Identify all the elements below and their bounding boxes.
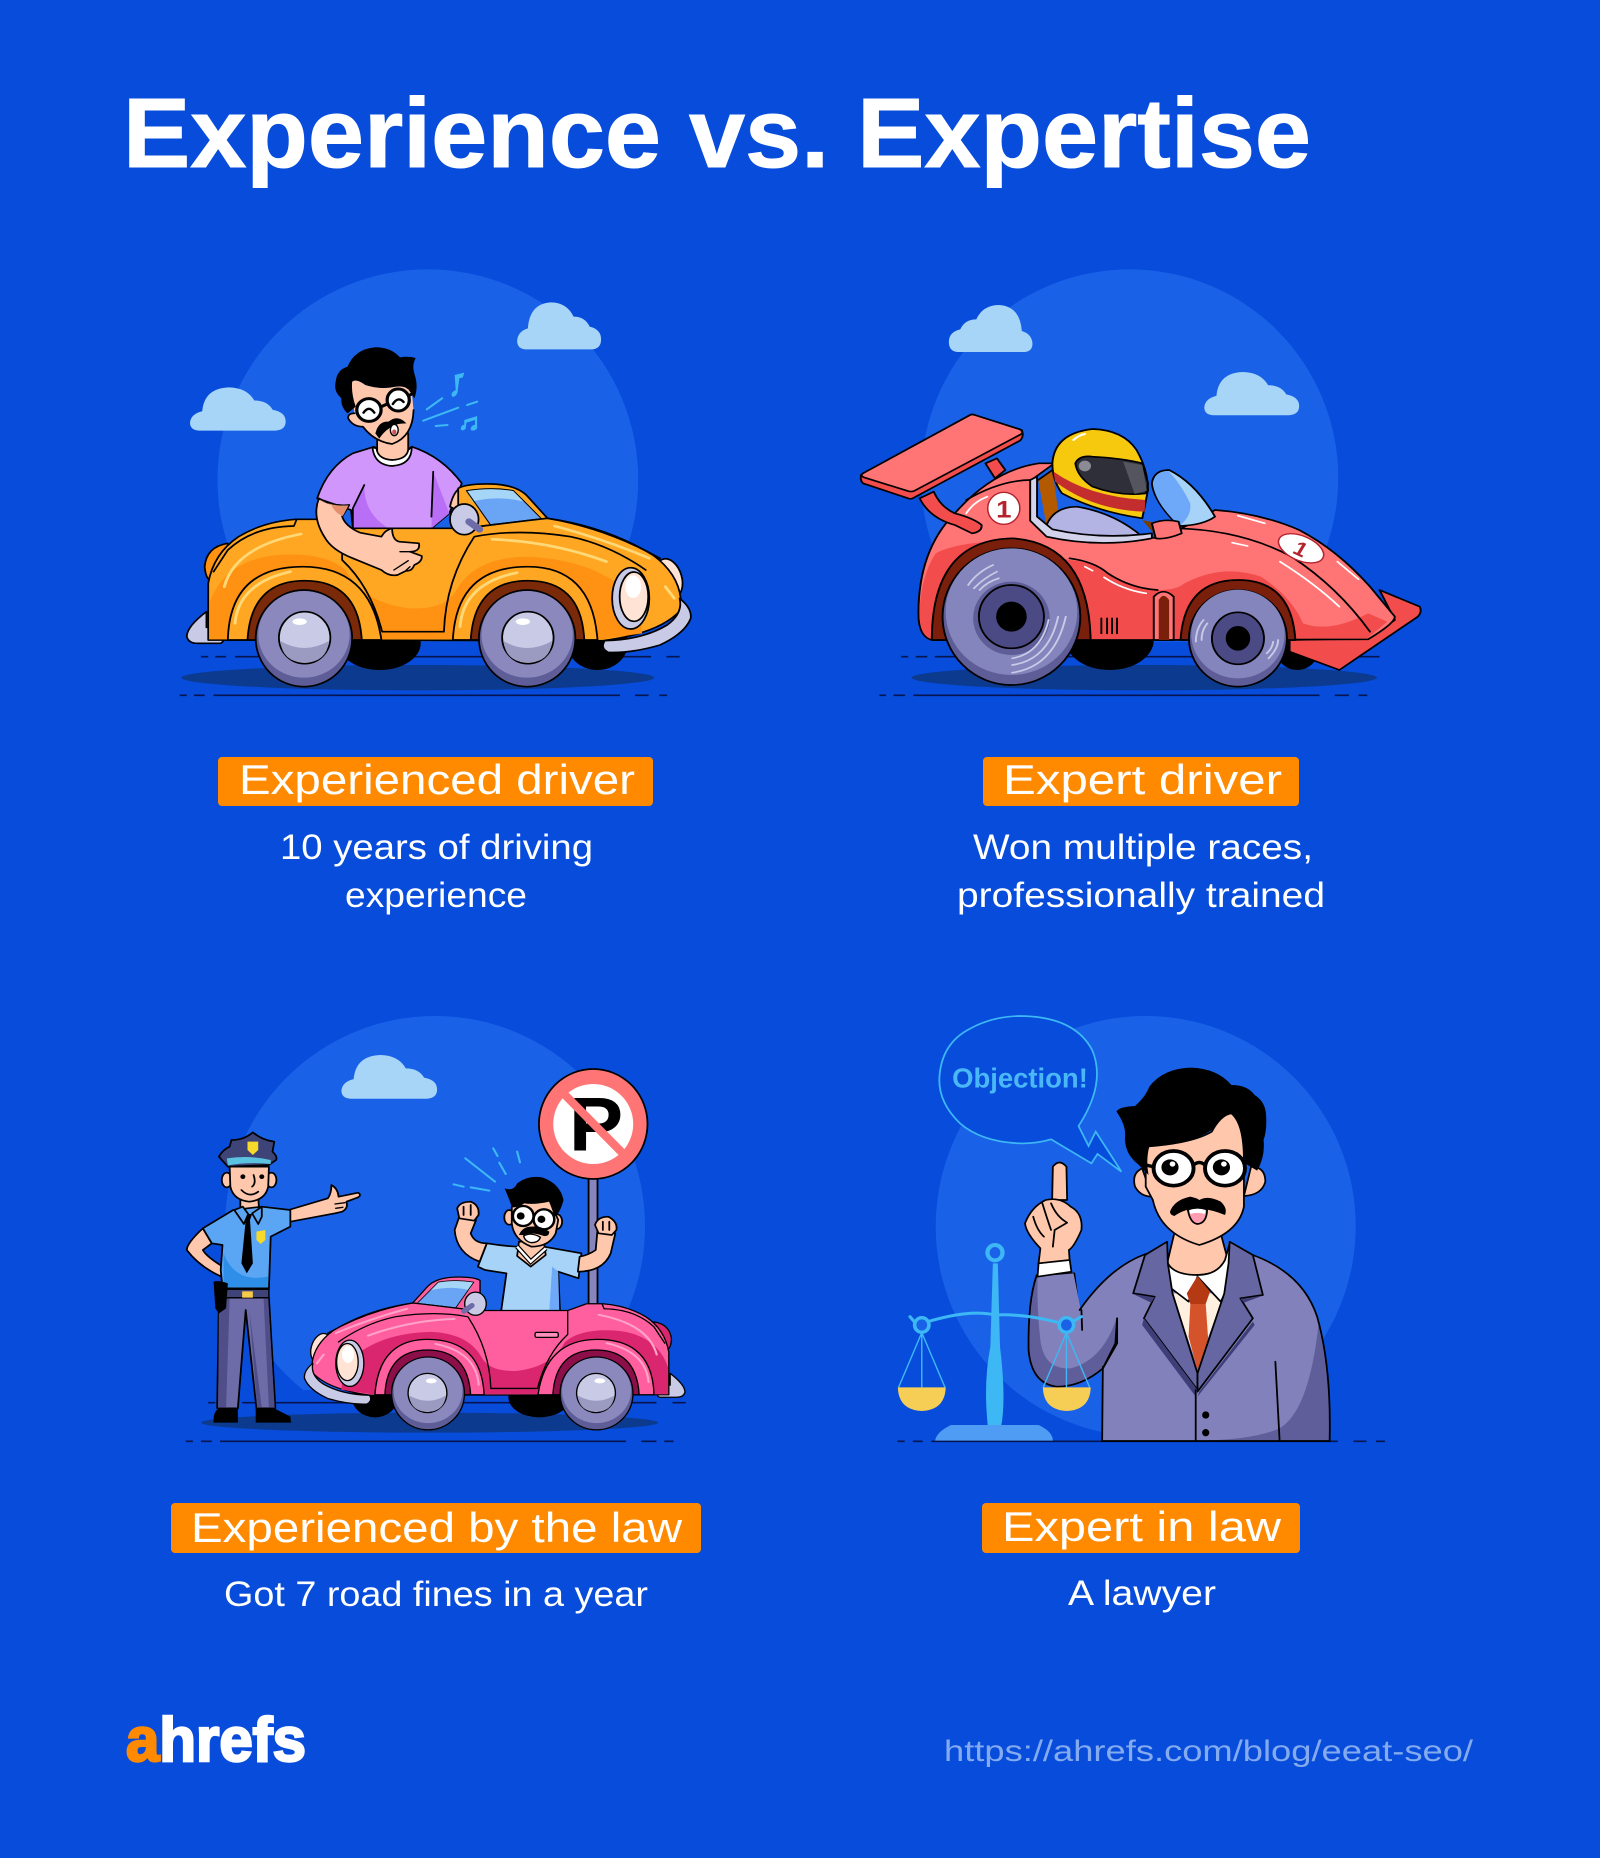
justice scale <box>898 1245 1091 1441</box>
highlights <box>966 497 1358 607</box>
road lines <box>897 1439 1385 1444</box>
front wheel <box>1181 580 1295 640</box>
side vents <box>1154 592 1174 640</box>
title: Experience vs. Expertise <box>123 78 1311 188</box>
speech bubble: Objection! <box>952 1063 1088 1094</box>
text: expert in law description: A lawyer <box>1068 1574 1216 1613</box>
rear wing strut <box>920 492 982 533</box>
helmeted driver <box>1038 429 1158 537</box>
anger lines <box>454 1148 520 1191</box>
police officer <box>187 1132 360 1423</box>
cloud right <box>1204 372 1299 415</box>
panel: experienced by the law illustration <box>160 1016 720 1447</box>
angry driver <box>455 1177 617 1312</box>
music notes <box>423 373 477 431</box>
background circle <box>921 269 1338 686</box>
text: experienced driver description <box>280 828 593 915</box>
no parking sign: P <box>569 1082 623 1167</box>
speech bubble <box>939 1016 1121 1172</box>
driver <box>317 347 474 528</box>
panel: expert driver illustration <box>840 269 1440 698</box>
road lines <box>186 1403 686 1441</box>
rear wheel <box>932 538 1091 640</box>
number badge front: 1 <box>1289 537 1312 562</box>
panel: experienced driver illustration <box>160 269 720 698</box>
text: expert driver description: professionally trained <box>957 876 1325 915</box>
cloud <box>341 1055 437 1099</box>
cloud left <box>949 305 1032 352</box>
pink car <box>304 1277 685 1430</box>
number badge rear: 1 <box>996 497 1011 523</box>
logo: ahrefs: ahrefs <box>126 1706 306 1775</box>
label: expert driver: Expert driver <box>1003 756 1282 803</box>
windscreen <box>1152 470 1215 526</box>
text: experienced driver description: experience <box>345 876 527 915</box>
label: experienced by the law: Experienced by the law <box>191 1504 683 1551</box>
cloud left <box>190 387 286 431</box>
background circle <box>936 1016 1356 1437</box>
road lines <box>879 657 1380 695</box>
ground shadow <box>912 665 1377 690</box>
label: expert in law: Expert in law <box>1002 1503 1282 1550</box>
lawyer <box>1025 1068 1330 1441</box>
background circle <box>217 269 638 690</box>
label: experienced driver: Experienced driver <box>239 756 635 803</box>
number badge front <box>1273 528 1329 569</box>
background circle <box>225 1016 645 1437</box>
cloud right <box>517 302 601 349</box>
road lines <box>180 657 680 695</box>
driver arm and hand <box>316 498 422 575</box>
ground shadow <box>201 1413 658 1433</box>
panel: expert in law illustration <box>897 1016 1385 1441</box>
rear wing <box>861 414 1023 499</box>
number badge rear <box>988 492 1020 524</box>
car: orange convertible <box>187 484 691 687</box>
text: expert driver description <box>957 828 1325 915</box>
ground shadow <box>181 665 654 690</box>
no parking sign <box>539 1069 647 1305</box>
text: experienced by the law description: Got 7 road fines in a year <box>224 1575 648 1614</box>
text: expert driver description: Won multiple races, <box>973 828 1313 867</box>
text: experienced driver description: 10 years of driving <box>280 828 593 867</box>
source url: https://ahrefs.com/blog/eeat-seo/ <box>944 1735 1474 1768</box>
race car <box>861 414 1421 687</box>
